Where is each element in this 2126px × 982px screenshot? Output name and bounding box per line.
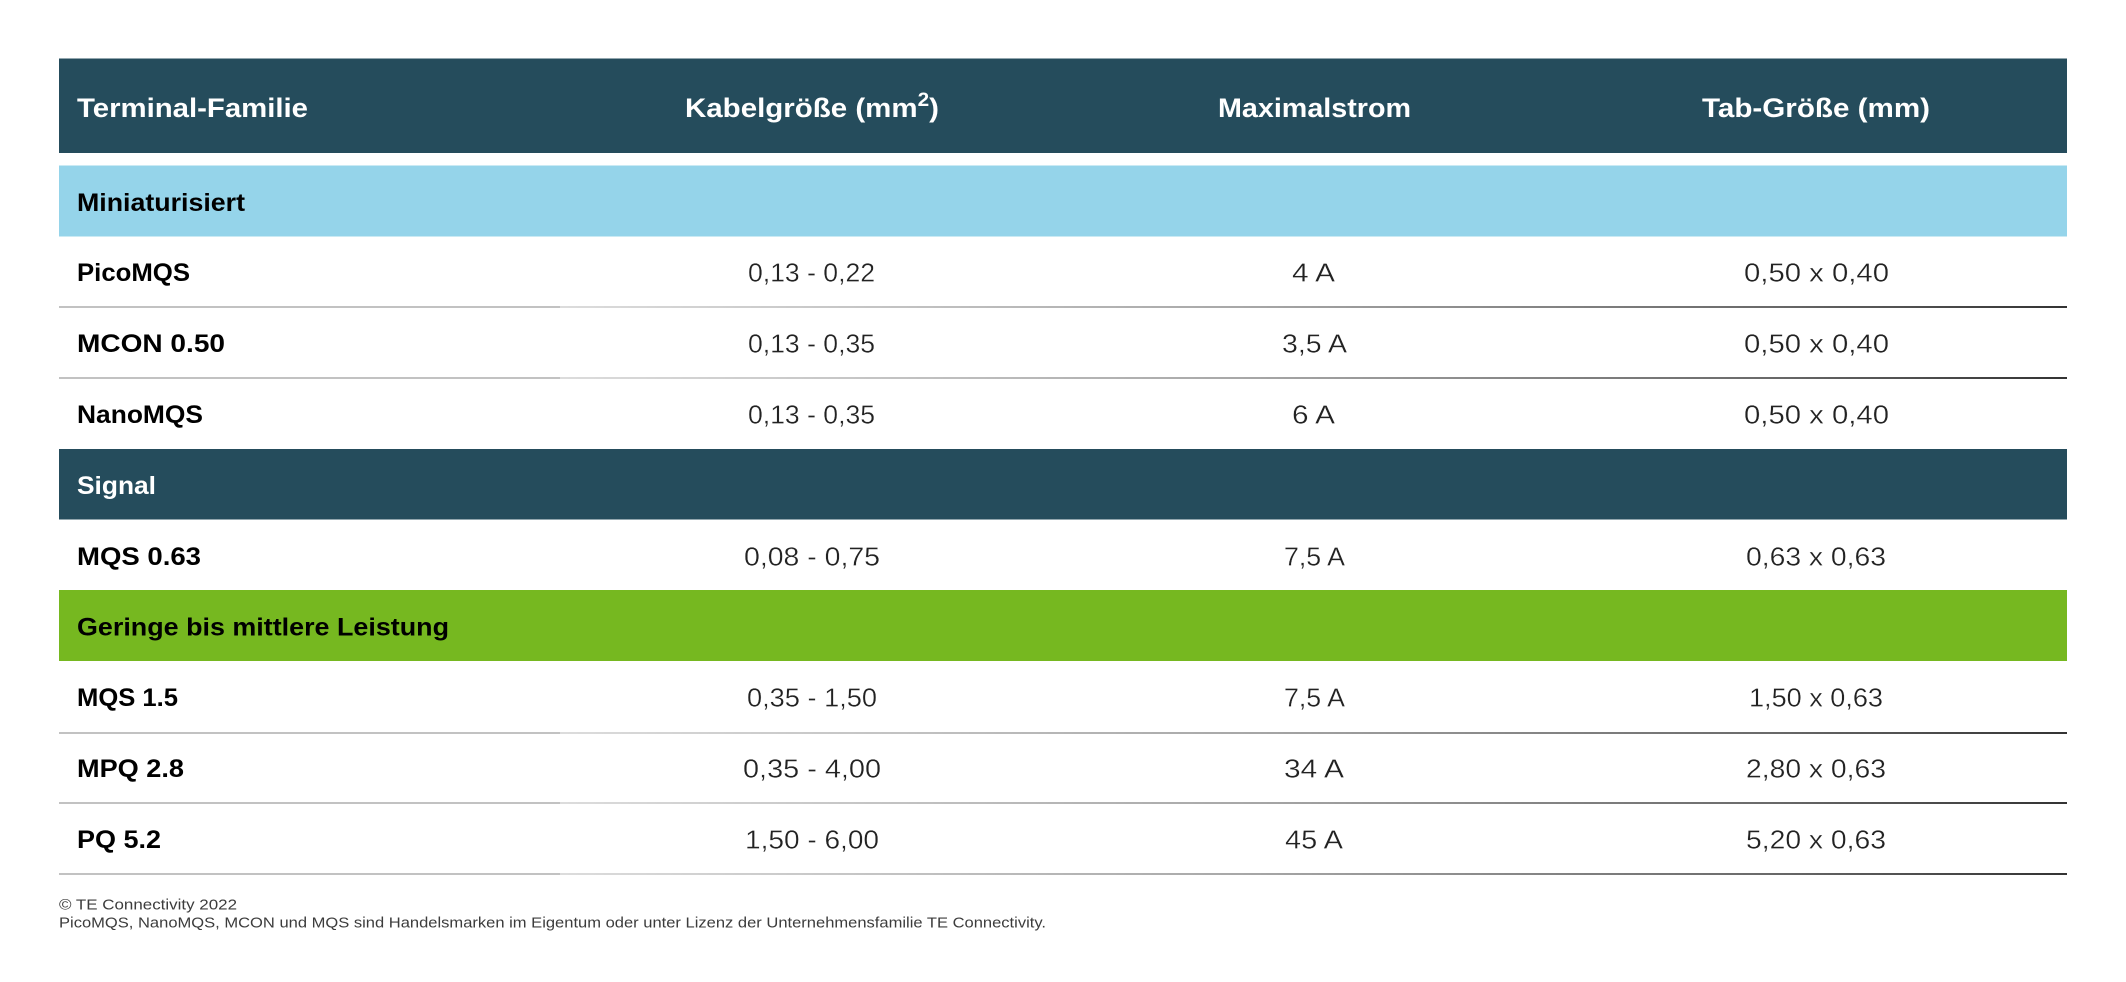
row: MQS 0.63: MQS 0.63 xyxy=(77,543,201,571)
row: PQ 5.2 xyxy=(77,824,1886,854)
row: NanoMQS: 0,50 x 0,40 xyxy=(1744,400,1889,430)
row: NanoMQS: 0,13 - 0,35 xyxy=(748,400,875,430)
section: Miniaturisiert: Miniaturisiert xyxy=(77,189,246,217)
header: Tab-Größe: Tab-Größe (mm) xyxy=(1702,93,1930,123)
row: PicoMQS: PicoMQS xyxy=(77,259,190,287)
row: MCON 0.50: 0,50 x 0,40 xyxy=(1744,328,1889,358)
section: Geringe bis mittlere Leistung xyxy=(59,590,2067,661)
section: Miniaturisiert xyxy=(59,166,2067,236)
row: MPQ 2.8: 2,80 x 0,63 xyxy=(1746,754,1886,784)
row: PQ 5.2: 1,50 - 6,00 xyxy=(745,824,879,854)
row: MQS 0.63: 0,63 x 0,63 xyxy=(1746,542,1886,572)
row: PQ 5.2: 45 A xyxy=(1285,824,1344,854)
row: MQS 1.5: MQS 1.5 xyxy=(77,684,178,712)
row: MQS 0.63: 7,5 A xyxy=(1284,542,1346,572)
row: MQS 0.63: 0,08 - 0,75 xyxy=(744,542,880,572)
header: Maximalstrom: Maximalstrom xyxy=(1218,93,1411,123)
row: MCON 0.50: 0,13 - 0,35 xyxy=(748,328,875,358)
table header xyxy=(59,58,2067,153)
row: PQ 5.2: 5,20 x 0,63 xyxy=(1746,824,1886,854)
header: Kabelgröße: ) xyxy=(929,93,939,123)
header: Kabelgröße: 2 xyxy=(918,90,929,111)
row: MCON 0.50: 3,5 A xyxy=(1282,328,1348,358)
row: MQS 1.5: 0,35 - 1,50 xyxy=(747,682,877,712)
row: MPQ 2.8: MPQ 2.8 xyxy=(77,755,184,783)
row: PQ 5.2: PQ 5.2 xyxy=(77,826,161,854)
header: Kabelgröße: Kabelgröße (mm xyxy=(685,93,898,123)
row: PicoMQS: 4 A xyxy=(1292,258,1336,288)
row: MPQ 2.8: 0,35 - 4,00 xyxy=(743,754,881,784)
row: MQS 1.5: 1,50 x 0,63 xyxy=(1749,682,1883,712)
section: Signal: Signal xyxy=(77,472,156,500)
row: NanoMQS xyxy=(77,400,1889,430)
section: Signal xyxy=(59,449,2067,520)
row: MPQ 2.8: 34 A xyxy=(1284,754,1345,784)
row: MCON 0.50: MCON 0.50 xyxy=(77,330,225,358)
footnote: PicoMQS, NanoMQS, MCON und MQS sind Handelsmarken im Eigentum oder unter Lizenz der Unternehmensfamilie TE Connectivity. xyxy=(59,914,1046,932)
row: MCON 0.50 xyxy=(77,328,1889,358)
header: Terminal-Familie: Terminal-Familie xyxy=(77,93,308,123)
footnote xyxy=(59,896,1046,932)
row: MQS 0.63 xyxy=(77,542,1886,572)
row: PicoMQS: 0,13 - 0,22 xyxy=(748,258,875,288)
row: PicoMQS: 0,50 x 0,40 xyxy=(1744,258,1889,288)
section: Geringe bis mittlere Leistung: Geringe bis mittlere Leistung xyxy=(77,614,449,642)
row: NanoMQS: 6 A xyxy=(1292,400,1336,430)
row: MQS 1.5: 7,5 A xyxy=(1284,682,1346,712)
row: MPQ 2.8 xyxy=(77,754,1886,784)
row: MQS 1.5 xyxy=(77,682,1883,712)
row: PicoMQS xyxy=(77,258,1889,288)
footnote: © TE Connectivity 2022 xyxy=(59,896,237,914)
row: NanoMQS: NanoMQS xyxy=(77,401,203,429)
